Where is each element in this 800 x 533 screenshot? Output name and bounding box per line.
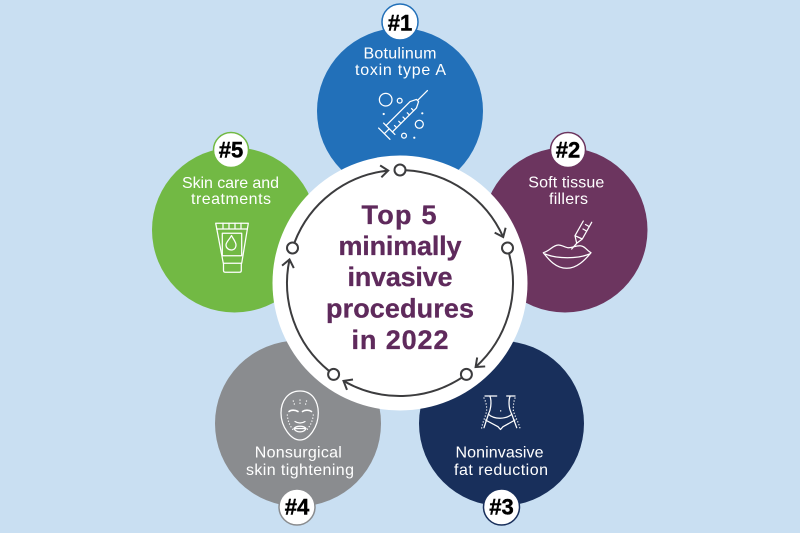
cycle arrows — [287, 164, 513, 396]
icon: torso — [482, 396, 520, 430]
label: skin care and treatments: treatments — [191, 191, 271, 208]
panel: #4 nonsurgical skin tightening — [215, 340, 381, 525]
panel: #5 skin care and treatments — [152, 132, 317, 312]
panel: #3 noninvasive fat reduction — [419, 341, 584, 525]
badge: #2: #2 — [556, 138, 580, 162]
icon: lips with syringe — [543, 221, 592, 268]
label: soft tissue fillers — [528, 175, 604, 208]
panel: #2 soft tissue fillers — [482, 132, 648, 312]
label: nonsurgical skin tightening — [246, 445, 354, 479]
panel: #1 botulinum toxin type A — [317, 4, 483, 194]
panel: central circle — [272, 156, 528, 410]
label: soft tissue fillers: fillers — [549, 191, 588, 208]
label: skin care and treatments — [182, 175, 279, 208]
title: minimally — [338, 231, 462, 261]
badge: #1 — [382, 4, 418, 40]
label: botulinum toxin: Botulinum — [364, 45, 436, 62]
icon: cream tube — [216, 223, 248, 272]
title — [326, 200, 474, 355]
badge: #3: #3 — [489, 494, 514, 520]
label: skin care and treatments: Skin care and — [182, 175, 279, 192]
badge: #4 — [279, 489, 315, 525]
badge: #5: #5 — [219, 138, 243, 162]
badge: #3 — [484, 489, 520, 525]
label: botulinum toxin — [355, 45, 446, 79]
label: noninvasive fat reduction: Noninvasive — [456, 445, 544, 462]
label: soft tissue fillers: Soft tissue — [528, 175, 604, 192]
badge: #4: #4 — [285, 494, 310, 520]
label: noninvasive fat reduction: fat reduction — [454, 462, 548, 479]
icon: syringe — [379, 85, 433, 139]
title: in 2022 — [352, 325, 448, 355]
title: Top 5 — [362, 200, 436, 230]
label: noninvasive fat reduction — [454, 445, 548, 479]
label: nonsurgical skin tightening: skin tightening — [246, 462, 354, 479]
label: botulinum toxin: toxin type A — [355, 62, 446, 79]
badge: #1: #1 — [388, 10, 412, 36]
icon: face — [281, 391, 318, 440]
badge: #2 — [550, 132, 586, 168]
label: nonsurgical skin tightening: Nonsurgical — [255, 445, 342, 462]
badge: #5 — [214, 132, 248, 168]
title: invasive — [348, 262, 452, 292]
title: procedures — [326, 294, 474, 324]
